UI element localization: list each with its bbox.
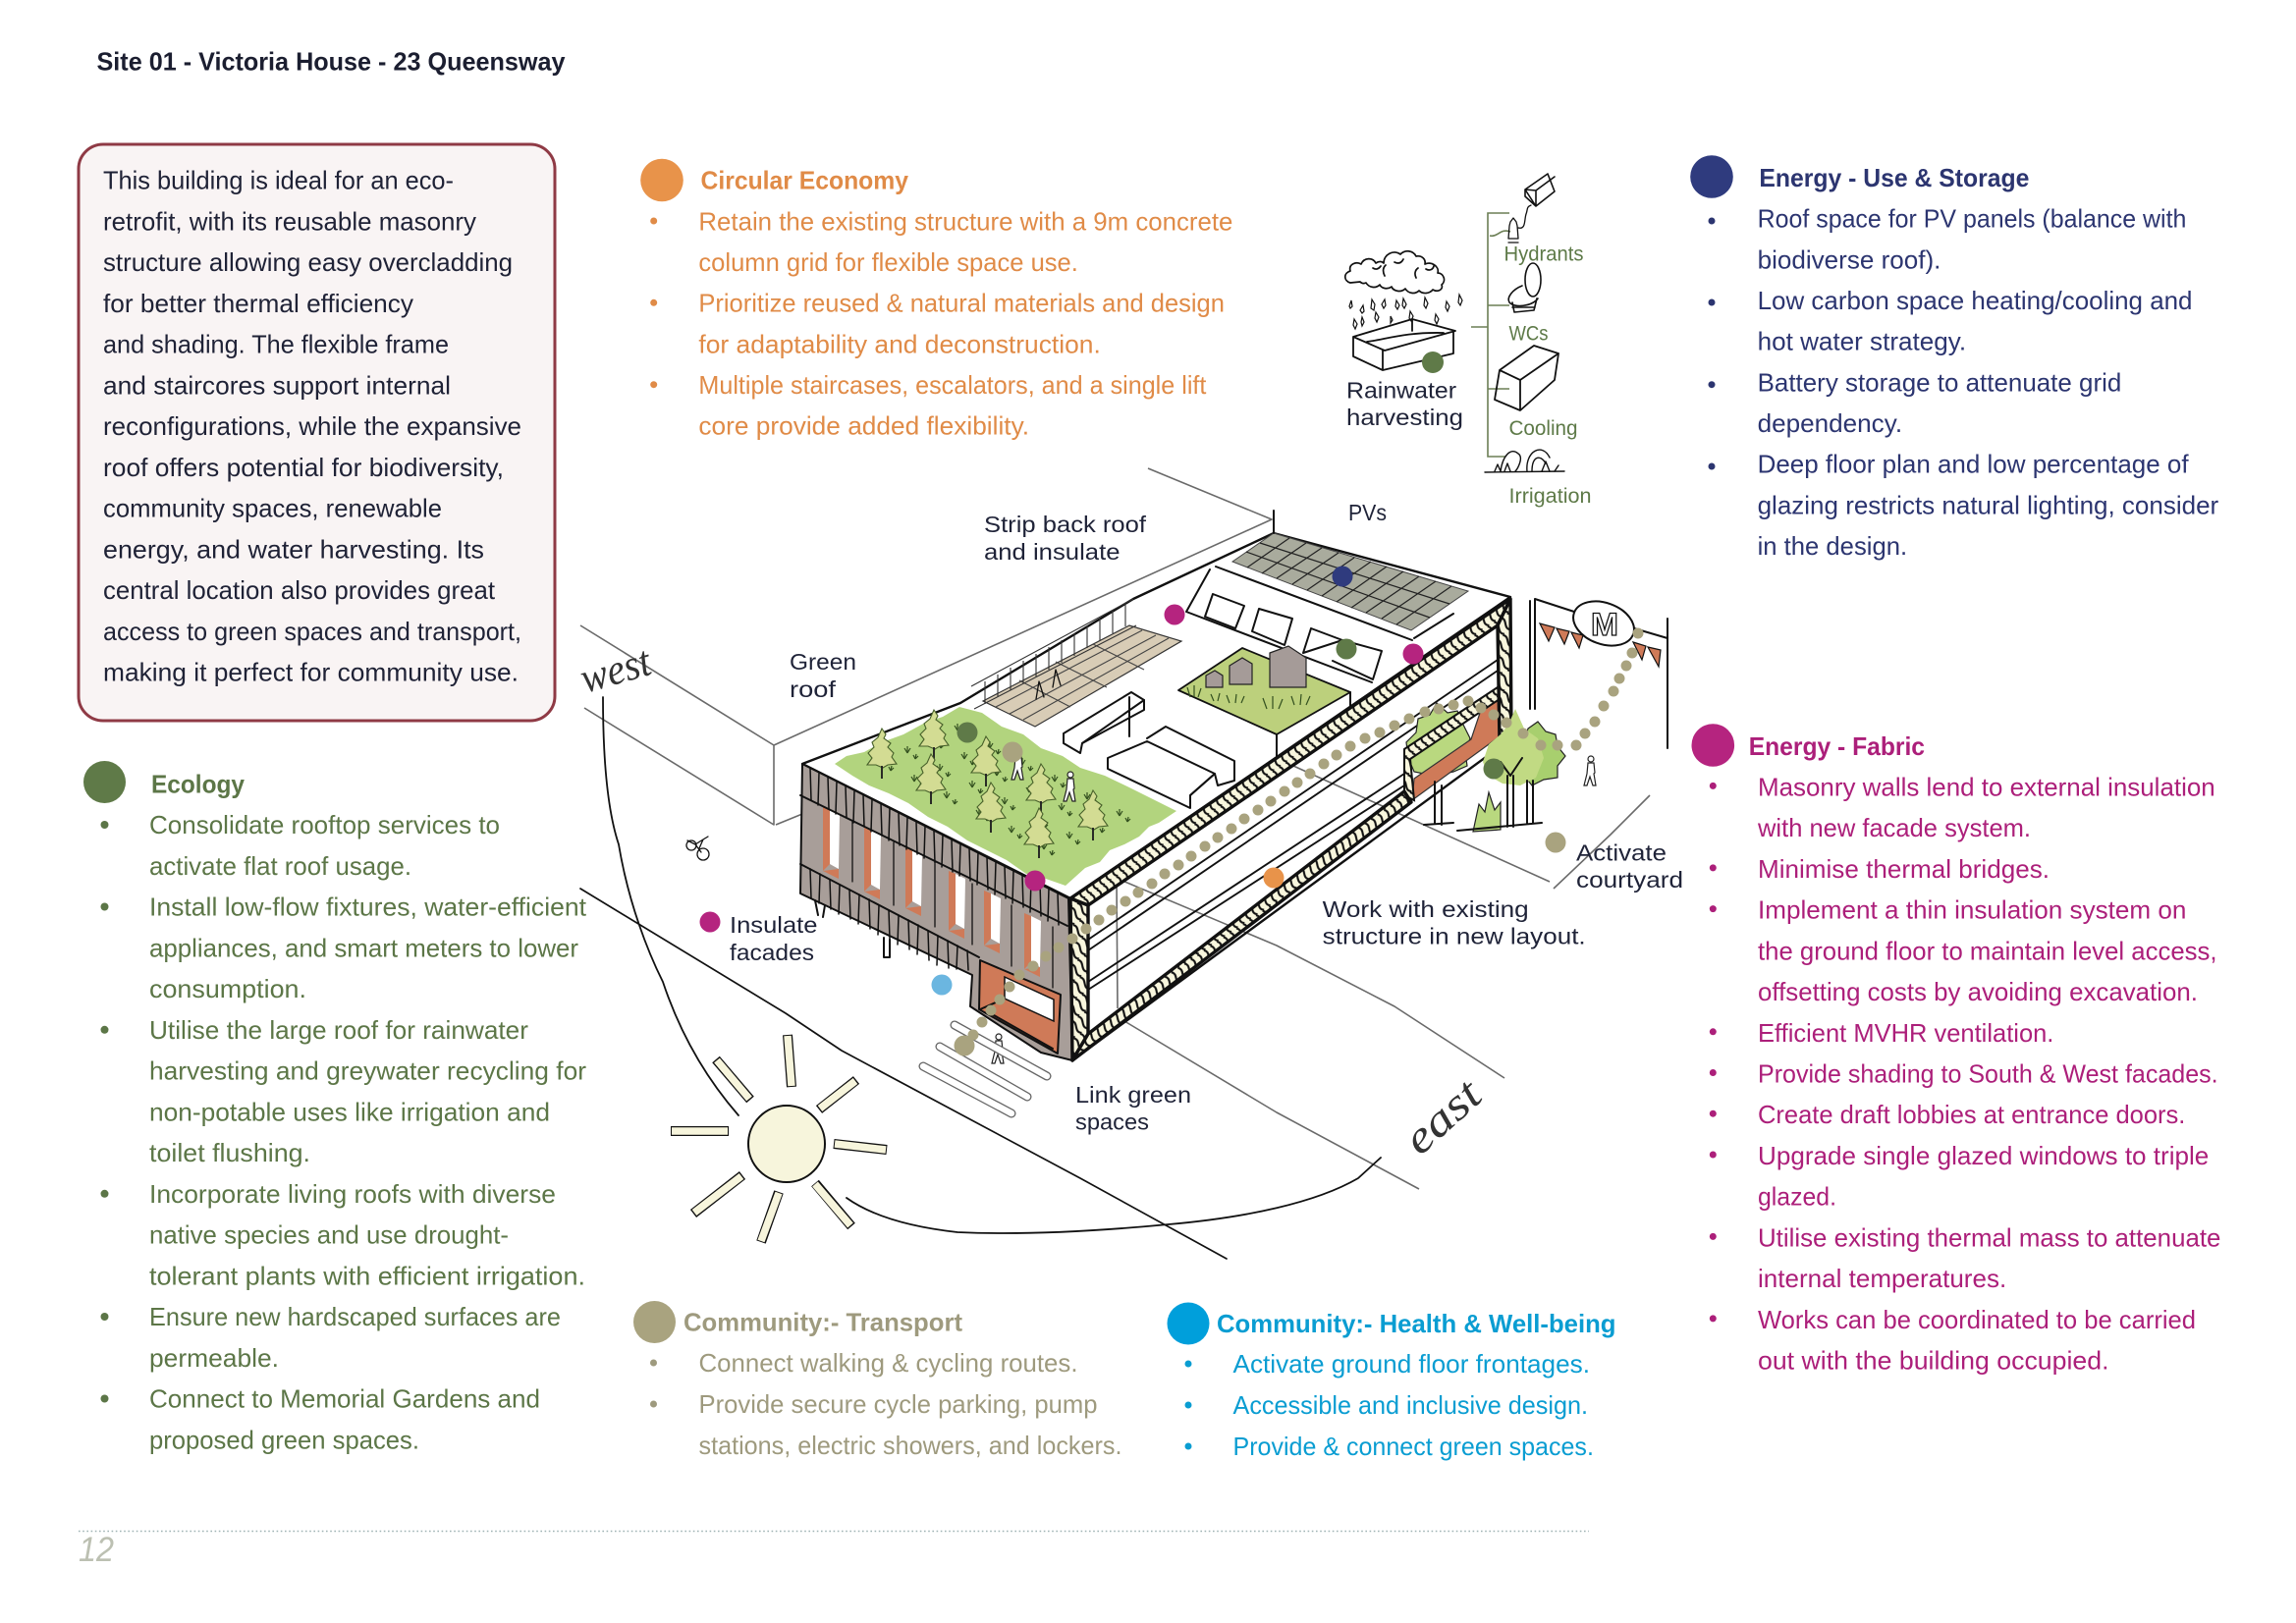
panel: circular economy: Retain the existing structure with a 9m concrete: [698, 206, 1232, 236]
label: green roof: [790, 649, 856, 702]
figures: [992, 756, 1596, 1063]
text: rainwater harvesting: Rainwater: [1346, 377, 1456, 403]
panel: energy use and storage: biodiverse roof).: [1758, 244, 1941, 274]
panel: energy fabric: Utilise existing thermal mass to attenuate: [1758, 1222, 2220, 1252]
panel: energy fabric: Upgrade single glazed windows to triple: [1758, 1141, 2209, 1170]
panel: energy fabric: Create draft lobbies at entrance doors.: [1758, 1100, 2185, 1129]
panel: energy fabric: Implement a thin insulation system on: [1758, 895, 2186, 925]
courtyard trees: [1424, 709, 1565, 832]
east facade: [1070, 599, 1511, 1060]
label: green roof: Green: [790, 649, 856, 675]
deck and fence: [971, 599, 1181, 727]
panel: ecology: non-potable uses like irrigation and: [149, 1097, 550, 1126]
panel: introduction: access to green spaces and transport,: [103, 617, 521, 646]
panel: circular economy: column grid for flexible space use.: [698, 247, 1078, 277]
panel: energy use and storage: Deep floor plan and low percentage of: [1758, 450, 2189, 479]
label: pvs: PVs: [1348, 500, 1387, 525]
panel: energy fabric: offsetting costs by avoiding excavation.: [1758, 977, 2198, 1006]
diagram: site context lines: [580, 468, 1650, 1259]
icon: rainwater harvesting: [1345, 251, 1462, 370]
panel: community health and well-being: Provide & connect green spaces.: [1233, 1432, 1594, 1461]
panel: ecology: toilet flushing.: [149, 1138, 310, 1167]
panel: community health and well-being: Community:- Health & Well-being: [1217, 1309, 1616, 1338]
label: strip back roof: Strip back roof: [984, 512, 1147, 537]
panel: ecology: Consolidate rooftop services to: [149, 810, 500, 839]
panel: ecology: Ensure new hardscaped surfaces are: [149, 1302, 561, 1331]
panel: energy fabric: Energy - Fabric: [1749, 731, 1925, 761]
icon: irrigation: [1485, 450, 1564, 472]
panel: energy use and storage: dependency.: [1758, 408, 1902, 438]
green roof: [835, 707, 1176, 886]
panel: ecology: Utilise the large roof for rainwater: [149, 1015, 528, 1045]
text: east: east: [1394, 1068, 1492, 1163]
panel: community transport: Community:- Transport: [683, 1308, 962, 1337]
panel: introduction: community spaces, renewable: [103, 494, 442, 523]
panel: community transport: [633, 1301, 1121, 1460]
icon: sun: [671, 1035, 887, 1242]
panel: introduction: and staircores support internal: [103, 371, 451, 401]
panel: introduction: retrofit, with its reusable masonry: [103, 206, 476, 236]
panel: introduction: and shading. The flexible frame: [103, 330, 449, 359]
courtyard sign with bunting: [1530, 593, 1667, 748]
panel: ecology: harvesting and greywater recycling for: [149, 1056, 586, 1086]
label: link green spaces: spaces: [1075, 1109, 1149, 1135]
panel: energy fabric: Efficient MVHR ventilation.: [1758, 1018, 2053, 1048]
page number: 12: [79, 1531, 114, 1569]
panel: energy use and storage: in the design.: [1758, 531, 1907, 561]
crossing stripes: [923, 1025, 1047, 1113]
panel: community health and well-being: Accessible and inclusive design.: [1233, 1390, 1588, 1420]
text: rainwater harvesting: harvesting: [1346, 405, 1463, 430]
panel: introduction: for better thermal efficiency: [103, 289, 413, 318]
label: work with existing structure: Work with existing: [1323, 896, 1529, 922]
wildflower roof with huts: [1178, 646, 1350, 758]
panel: introduction: This building is ideal for an eco-: [103, 166, 454, 195]
route dots: [973, 633, 1638, 1035]
courtyard opening: [1404, 687, 1500, 800]
text: wcs: WCs: [1508, 322, 1548, 346]
panel: energy fabric: [1691, 724, 2220, 1376]
panel: ecology: Incorporate living roofs with diverse: [149, 1179, 556, 1209]
label: work with existing structure: structure in new layout.: [1323, 924, 1586, 949]
label: insulate facades: [730, 912, 817, 965]
entrance: [979, 960, 1061, 1054]
panel: ecology: [83, 761, 587, 1454]
label: activate courtyard: Activate: [1576, 840, 1667, 866]
text: west: west: [574, 636, 658, 703]
panel: circular economy: core provide added flexibility.: [698, 411, 1029, 441]
panel: community transport: Provide secure cycle parking, pump: [699, 1389, 1098, 1419]
panel: energy fabric: the ground floor to maintain level access,: [1758, 936, 2217, 965]
panel: energy fabric: with new facade system.: [1757, 813, 2031, 842]
panel: energy fabric: internal temperatures.: [1758, 1264, 2006, 1293]
label: insulate facades: Insulate: [730, 912, 817, 938]
panel: community transport: stations, electric showers, and lockers.: [699, 1431, 1121, 1460]
panel: energy use and storage: Energy - Use & Storage: [1759, 163, 2029, 192]
panel: community transport: Connect walking & cycling routes.: [699, 1348, 1078, 1378]
panel: introduction: [79, 144, 555, 721]
panel: ecology: appliances, and smart meters to lower: [149, 933, 578, 962]
icon: toilet: [1508, 263, 1541, 312]
panel: introduction: central location also provides great: [103, 575, 496, 605]
panel: energy use and storage: Roof space for PV panels (balance with: [1758, 204, 2186, 234]
roof slab: [802, 533, 1510, 898]
panel: energy use and storage: Low carbon space heating/cooling and: [1758, 286, 2192, 315]
category markers: [699, 566, 1565, 1056]
panel: energy use and storage: Battery storage to attenuate grid: [1758, 367, 2121, 397]
panel: circular economy: [640, 159, 1232, 441]
panel: energy fabric: Masonry walls lend to external insulation: [1758, 772, 2215, 801]
icon: cooling unit: [1495, 346, 1558, 410]
panel: community health and well-being: Activate ground floor frontages.: [1233, 1349, 1590, 1379]
label: activate courtyard: [1576, 840, 1683, 893]
panel: circular economy: for adaptability and deconstruction.: [698, 329, 1101, 358]
panel: energy fabric: glazed.: [1758, 1182, 1836, 1212]
label: activate courtyard: courtyard: [1576, 867, 1683, 893]
panel: introduction: energy, and water harvesting. Its: [103, 534, 484, 564]
panel: introduction: structure allowing easy overcladding: [103, 247, 513, 277]
panel: ecology: native species and use drought-: [149, 1219, 509, 1249]
panel: ecology: consumption.: [149, 974, 306, 1003]
panel: circular economy: Circular Economy: [701, 165, 909, 194]
label: work with existing structure: [1323, 896, 1586, 949]
panel: energy fabric: Provide shading to South & West facades.: [1758, 1058, 2218, 1088]
icon: hydrant with tank: [1508, 174, 1555, 243]
panel: community health and well-being: [1167, 1302, 1616, 1461]
PV panels: [1186, 511, 1468, 682]
panel: introduction: making it perfect for community use.: [103, 658, 519, 687]
panel: energy fabric: out with the building occupied.: [1758, 1346, 2109, 1376]
panel: ecology: proposed green spaces.: [149, 1425, 419, 1454]
label: green roof: roof: [790, 676, 837, 702]
panel: ecology: Connect to Memorial Gardens and: [149, 1384, 540, 1414]
illustration: building: [699, 511, 1667, 1113]
text: cooling: Cooling: [1508, 417, 1577, 440]
panel: energy use and storage: [1690, 155, 2219, 561]
service boxes: [1064, 692, 1234, 808]
text: hydrants: Hydrants: [1504, 243, 1583, 265]
title: Site 01 - Victoria House - 23 Queensway: [96, 47, 566, 77]
icon: cyclist: [686, 837, 709, 860]
panel: energy use and storage: glazing restricts natural lighting, consider: [1758, 490, 2219, 519]
panel: ecology: activate flat roof usage.: [149, 851, 411, 881]
panel: ecology: permeable.: [149, 1343, 279, 1373]
courtyard sign with bunting: M: [1591, 607, 1618, 642]
label: strip back roof: and insulate: [984, 539, 1120, 565]
text: rainwater harvesting: [1346, 377, 1463, 430]
panel: ecology: tolerant plants with efficient irrigation.: [149, 1261, 585, 1290]
label: insulate facades: facades: [730, 940, 814, 965]
panel: energy fabric: Minimise thermal bridges.: [1758, 854, 2050, 884]
south facade: [800, 764, 1072, 1060]
panel: energy fabric: Works can be coordinated to be carried: [1758, 1305, 2196, 1334]
panel: circular economy: Prioritize reused & natural materials and design: [698, 289, 1225, 318]
label: link green spaces: Link green: [1075, 1082, 1191, 1108]
panel: ecology: Install low-flow fixtures, water-efficient: [149, 892, 587, 921]
label: strip back roof: [984, 512, 1147, 565]
panel: introduction: reconfigurations, while the expansive: [103, 411, 521, 441]
label: link green spaces: [1075, 1082, 1191, 1135]
panel: introduction: roof offers potential for biodiversity,: [103, 453, 504, 482]
panel: ecology: Ecology: [151, 770, 245, 799]
diagram: water distribution pipes: [1471, 213, 1510, 457]
panel: energy use and storage: hot water strategy.: [1758, 327, 1966, 356]
text: irrigation: Irrigation: [1508, 485, 1591, 508]
panel: circular economy: Multiple staircases, escalators, and a single lift: [698, 370, 1207, 400]
